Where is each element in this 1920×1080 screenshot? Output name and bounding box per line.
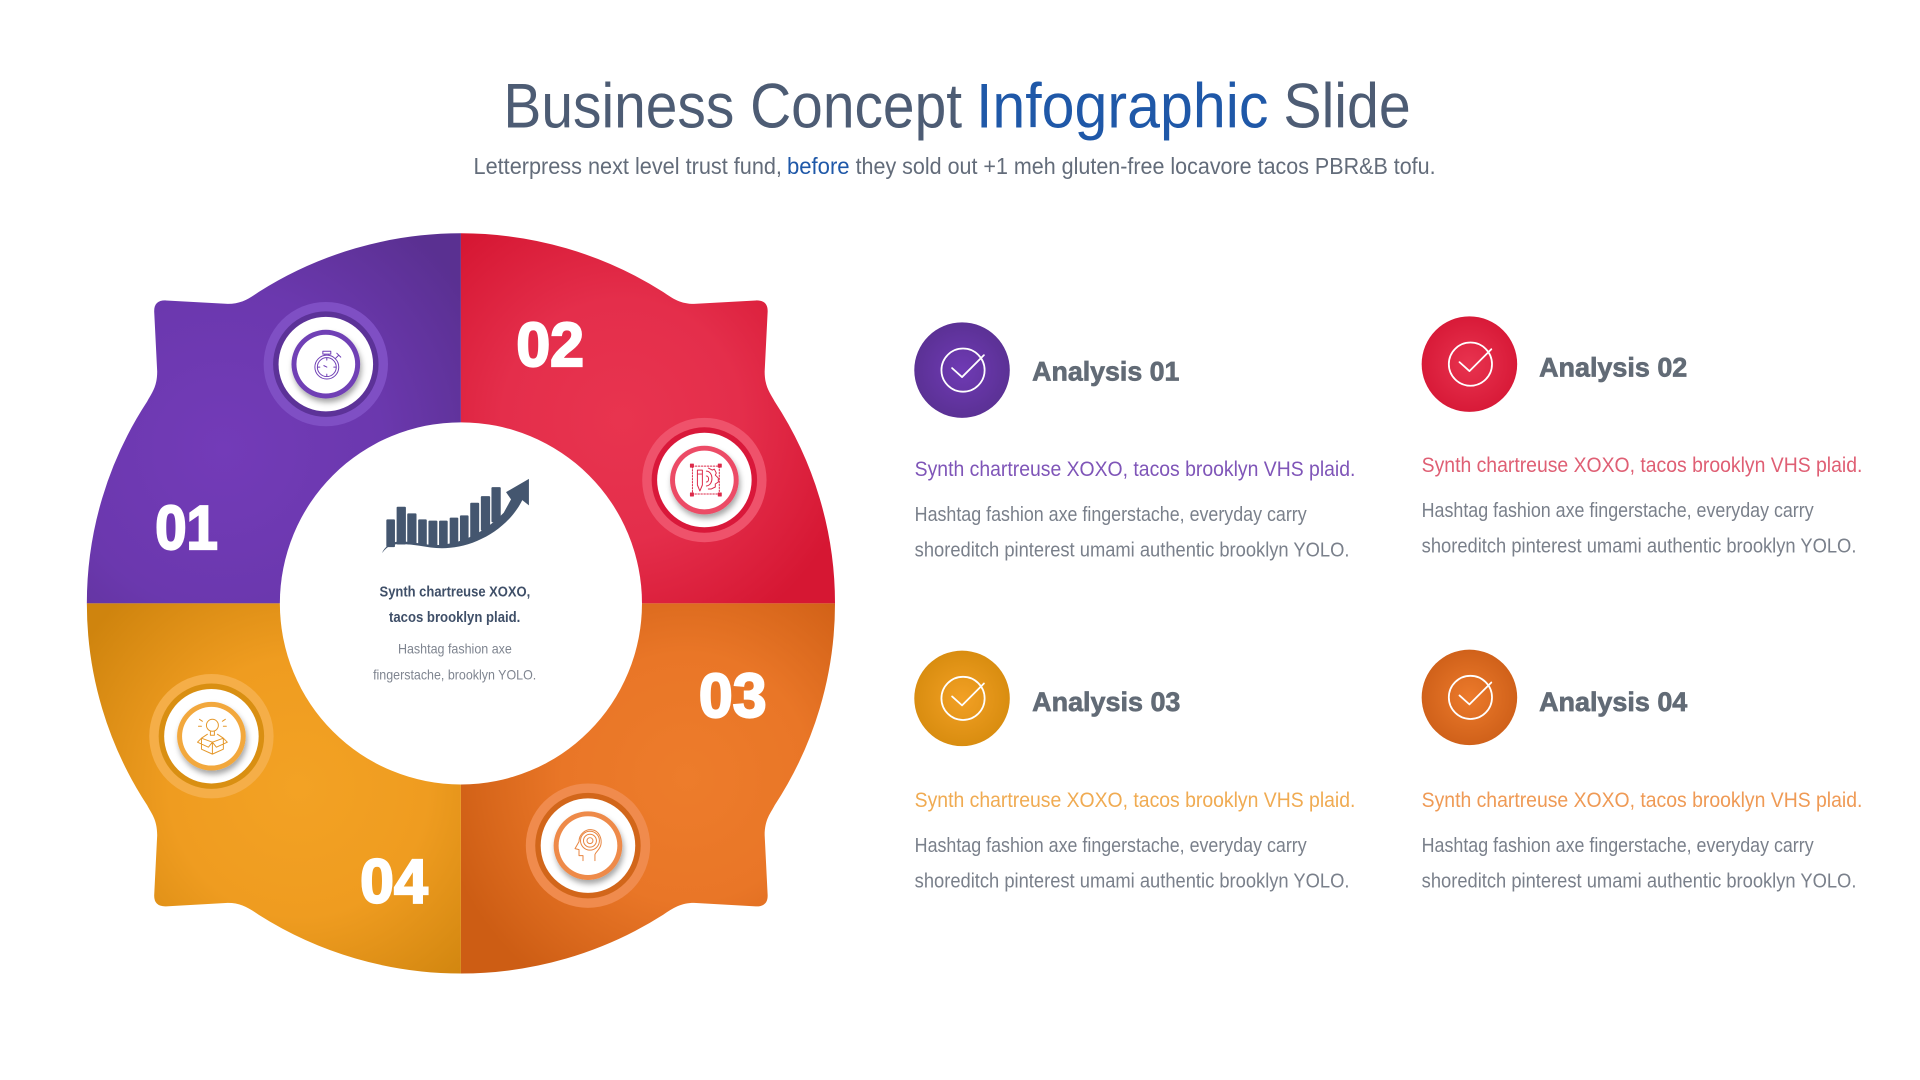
icon: head with maze [575,830,601,861]
subheading: Synth chartreuse XOXO, tacos brooklyn VHS plaid. [915,789,1355,812]
center white circle [280,422,642,784]
badge 04: idea box [149,674,274,798]
heading: Analysis 01 [1032,357,1179,387]
icon: check badge orange [1422,650,1517,745]
icon: check badge amber [914,651,1010,746]
subheading: Synth chartreuse XOXO, tacos brooklyn VHS plaid. [915,458,1355,481]
title: Business Concept [503,71,962,141]
center heading: Synth chartreuse XOXO, [380,584,530,600]
icon: box with light bulb [197,719,227,754]
icon: stopwatch [315,351,341,379]
icon: pencil and gear [690,464,721,496]
description: shoreditch pinterest umami authentic brooklyn YOLO. [915,870,1349,892]
segments and center disc [87,233,835,973]
description: shoreditch pinterest umami authentic brooklyn YOLO. [915,540,1349,562]
heading: Analysis 03 [1032,687,1180,717]
description: shoreditch pinterest umami authentic brooklyn YOLO. [1422,870,1856,892]
title [503,71,1411,141]
segment 02 red [461,233,835,603]
description [1422,835,1856,892]
center description: fingerstache, brooklyn YOLO. [373,667,536,683]
icon: check badge purple [914,322,1010,418]
panel: analysis 04 [1422,650,1862,892]
center heading: tacos brooklyn plaid. [389,610,520,626]
segment 03 orange [461,603,835,973]
segment 04 amber [87,603,461,973]
description: Hashtag fashion axe fingerstache, everyday carry [915,835,1307,857]
center description: Hashtag fashion axe [398,641,512,657]
center description [373,641,536,683]
number 04: 04 [360,847,428,916]
badge 03: brain head [526,783,650,908]
cycle diagram [87,233,835,973]
description [915,835,1349,892]
icon: check badge red [1422,316,1517,412]
subtitle [474,153,1436,179]
panel: analysis 01 [914,322,1355,562]
center heading [380,584,530,626]
subtitle: before [787,153,850,179]
subheading: Synth chartreuse XOXO, tacos brooklyn VHS plaid. [1422,789,1862,812]
badge 02: design gear [642,418,767,542]
description [1422,500,1856,558]
subheading: Synth chartreuse XOXO, tacos brooklyn VHS plaid. [1422,454,1862,477]
icon: rising bar chart with arrow [382,479,529,553]
panel: analysis 03 [914,651,1355,892]
description: Hashtag fashion axe fingerstache, everyday carry [1422,500,1814,522]
title: Infographic [976,71,1268,141]
badge 01: stopwatch [264,302,388,426]
subtitle: Letterpress next level trust fund, [474,153,782,179]
subtitle: they sold out +1 meh gluten-free locavore tacos PBR&B tofu. [856,153,1436,179]
panel: analysis 02 [1422,316,1862,558]
number 02: 02 [516,311,584,380]
description: shoreditch pinterest umami authentic brooklyn YOLO. [1422,536,1856,558]
number 01: 01 [155,494,218,563]
title: Slide [1283,71,1411,141]
description: Hashtag fashion axe fingerstache, everyday carry [1422,835,1814,857]
segment 01 purple [87,233,461,603]
description [915,504,1349,562]
description: Hashtag fashion axe fingerstache, everyday carry [915,504,1307,526]
heading: Analysis 04 [1539,687,1687,717]
heading: Analysis 02 [1539,353,1687,383]
number 03: 03 [699,662,767,731]
